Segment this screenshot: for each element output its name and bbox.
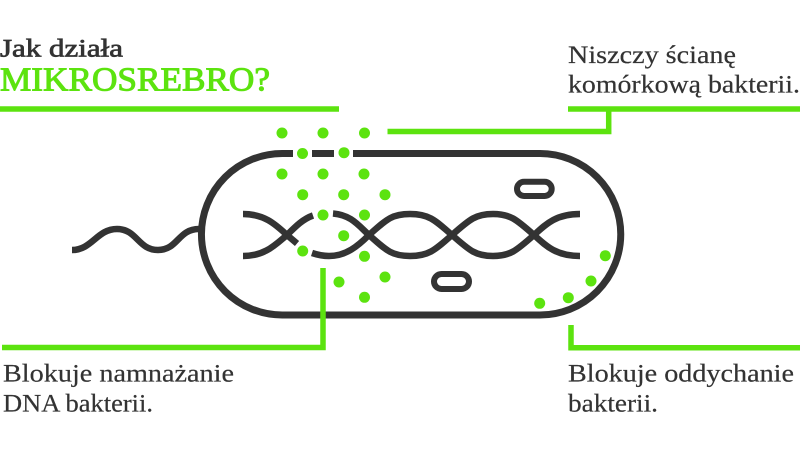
text: blocks respiration: Blokuje oddychanie: [568, 361, 794, 388]
text: blocks DNA replication: Blokuje namnażanie: [3, 361, 234, 388]
text: blocks DNA replication: DNA bakterii.: [3, 391, 153, 418]
DNA helix: [243, 214, 580, 256]
connector: DNA callout: [2, 268, 323, 348]
title: [0, 34, 270, 99]
silver particles: [276, 128, 611, 309]
text: blocks respiration: bakterii.: [568, 391, 658, 418]
text: blocks DNA replication: [3, 361, 234, 418]
organelle: upper right: [517, 182, 552, 196]
text: blocks respiration: [568, 361, 794, 418]
title: MIKROSREBRO?: [0, 62, 270, 99]
text: destroys cell wall: [568, 42, 800, 99]
connector: respiration callout: [571, 325, 800, 348]
connector: cell wall callout: [388, 109, 800, 132]
flagellum: [72, 229, 199, 250]
organelle: lower: [434, 274, 469, 289]
text: destroys cell wall: komórkową bakterii.: [568, 72, 800, 99]
bacterium body: [201, 154, 621, 315]
title: Jak działa: [0, 34, 123, 63]
text: destroys cell wall: Niszczy ścianę: [568, 42, 736, 69]
title underline: [0, 106, 339, 112]
